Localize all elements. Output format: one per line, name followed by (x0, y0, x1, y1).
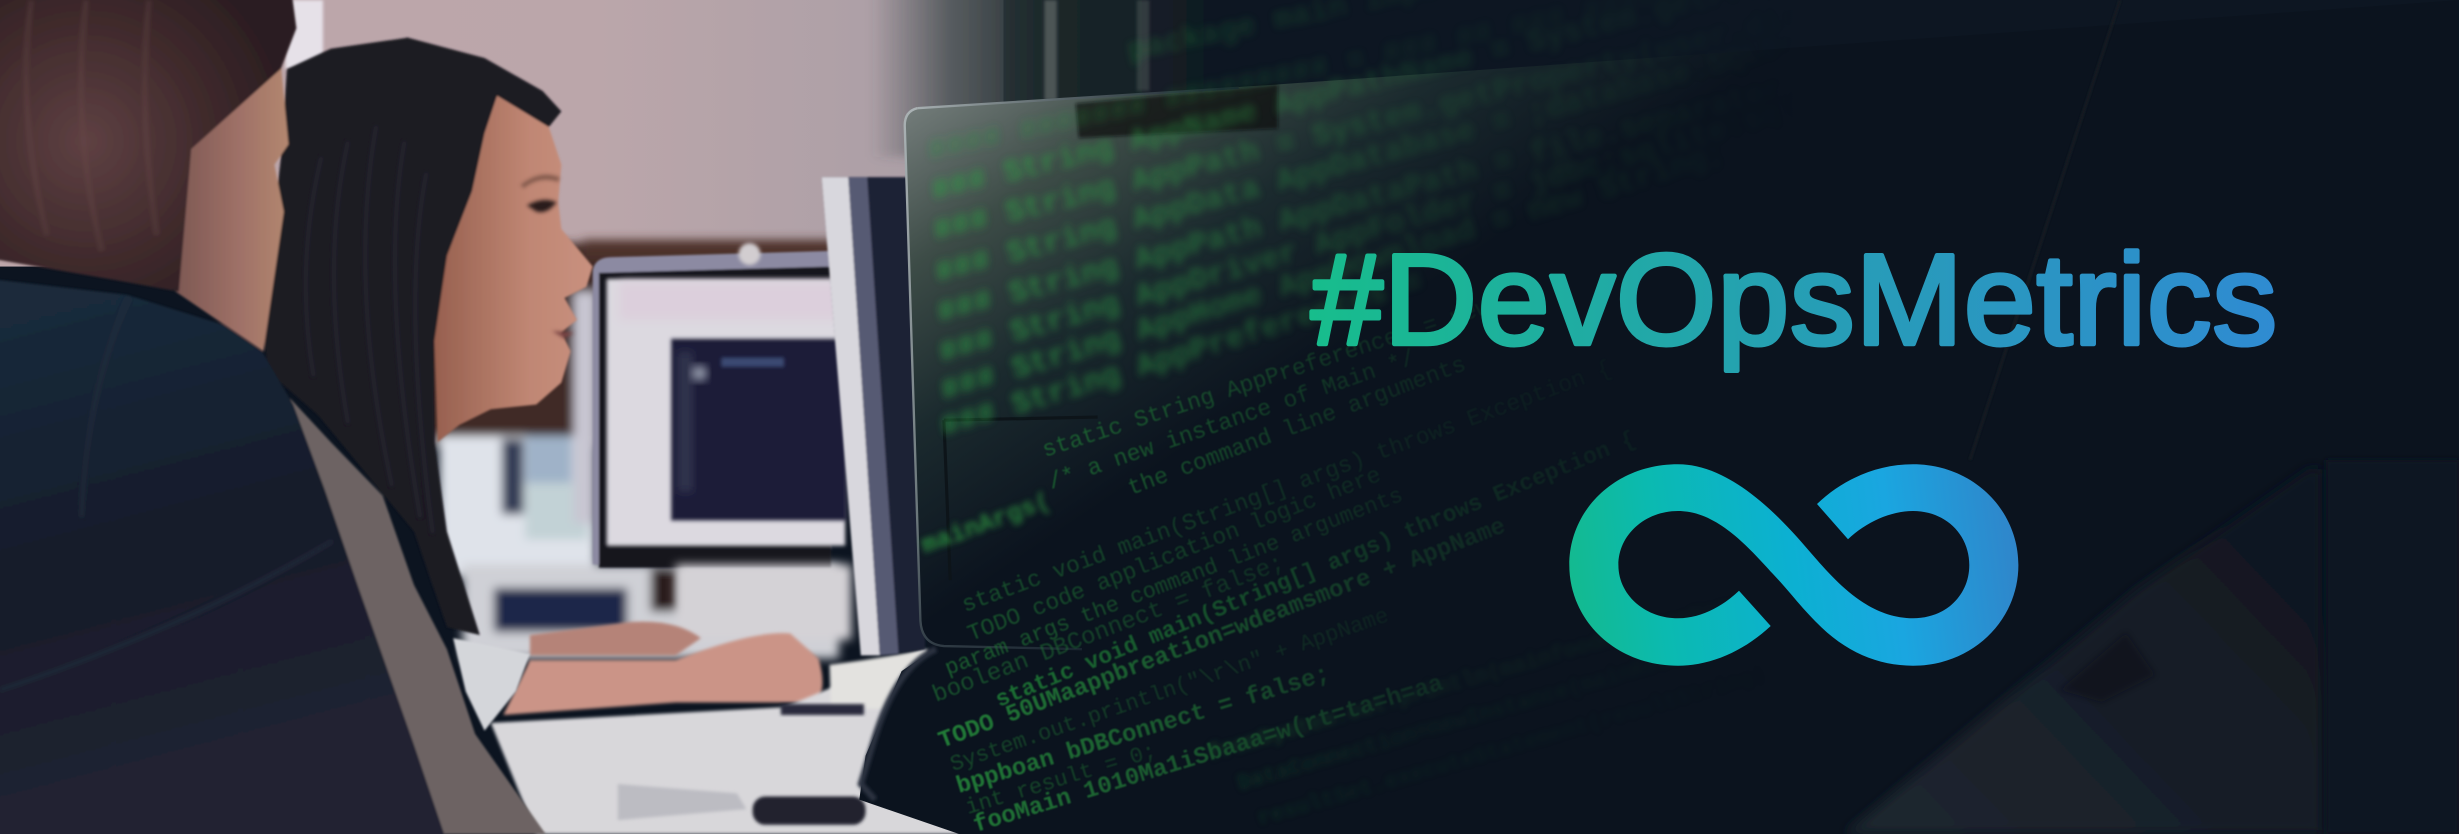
sharper code rows: int result = 0; (963, 739, 1159, 821)
dark band at top of the right side (870, 0, 2459, 157)
sharper code rows: static void main(String[] args) throws Exception { (992, 426, 1640, 713)
near arm and hand (503, 633, 823, 715)
blurred code rows (928, 2, 1578, 437)
papers (618, 784, 746, 820)
sharper code rows: TODO code application logic here (964, 462, 1385, 648)
sharper code rows: the command line arguments (1124, 352, 1470, 502)
far arm (530, 622, 701, 655)
cardigan of second developer (290, 398, 546, 834)
rear monitor (593, 243, 847, 568)
dark strip on top of screen (1076, 85, 1278, 138)
second developer face (434, 96, 593, 442)
window highlight (285, 0, 323, 69)
side monitor (822, 177, 925, 655)
sharper code rows: bppboan bDBConnect = false; (953, 661, 1333, 801)
lower right desk reflection (1845, 0, 2459, 834)
blurred code rows: ### String AppPreferences = (937, 265, 1427, 446)
first developer hair (0, 0, 296, 292)
white sleeve (453, 638, 530, 731)
title: #DevOpsMetrics: #DevOpsMetrics (1311, 228, 2277, 372)
cup (829, 649, 928, 709)
sharper code rows (918, 304, 1636, 832)
background pillars (1044, 0, 1149, 100)
people (0, 0, 593, 834)
sharper code rows: boolean DBConnect = false; (929, 550, 1288, 709)
blurred code rows: ### String AppData AppDatabase = ;database.SQLDriver (932, 7, 1875, 292)
keyboard (781, 704, 864, 715)
sharper code rows: /* a new instance of Main */ (1045, 345, 1419, 496)
blurred code rows: ### String AppPath AppDataPath = file.separator; (934, 67, 1805, 332)
sharper code rows: param args the command line arguments (942, 483, 1407, 682)
phone shadow (861, 649, 936, 800)
icon: infinity logo (1569, 464, 2018, 666)
glass edge: left and bottom (905, 108, 1082, 649)
blurred code rows: ### String AppHome AppDownload = new String; (937, 137, 1730, 410)
sharper code rows: TODO 50UMaappbreation=wdeamsmore + AppName (935, 513, 1510, 755)
blurred office background (423, 240, 847, 659)
sharper code rows: static void main(String[] args) throws Exception { (958, 356, 1615, 619)
sharper code rows: mainArgs( (918, 487, 1055, 561)
sharper code rows: System.out.println("\r\n" + AppName (947, 604, 1392, 778)
desk clutter under monitor (676, 564, 851, 640)
code on screen (918, 2, 1636, 832)
sharper code rows: static String AppPreferences = new (1039, 294, 1494, 464)
mouse (753, 797, 866, 825)
second developer eye and brow (521, 175, 574, 339)
first developer face (176, 63, 289, 351)
rear monitor dark window (671, 339, 847, 521)
sharper code rows: DataConnection=newInstance(mainResultSet (1235, 627, 1750, 797)
screen reflection boundary (944, 417, 1098, 580)
desk (491, 649, 960, 834)
second developer hair (262, 38, 561, 635)
blurred code rows: ### String AppDriver AppFolder = jdbc;sqlite:sql; (935, 87, 1821, 372)
sharper code rows: fromSystem.out.println(mainfoodmainAppName (1205, 590, 1745, 767)
dark glass panel and backdrop (859, 0, 2459, 834)
glass edge: top (917, 88, 1239, 108)
sharper code rows: resultSet.executeStatement(resultString) (1255, 662, 1770, 832)
wall background (0, 0, 1004, 267)
first developer shirt (0, 279, 447, 834)
